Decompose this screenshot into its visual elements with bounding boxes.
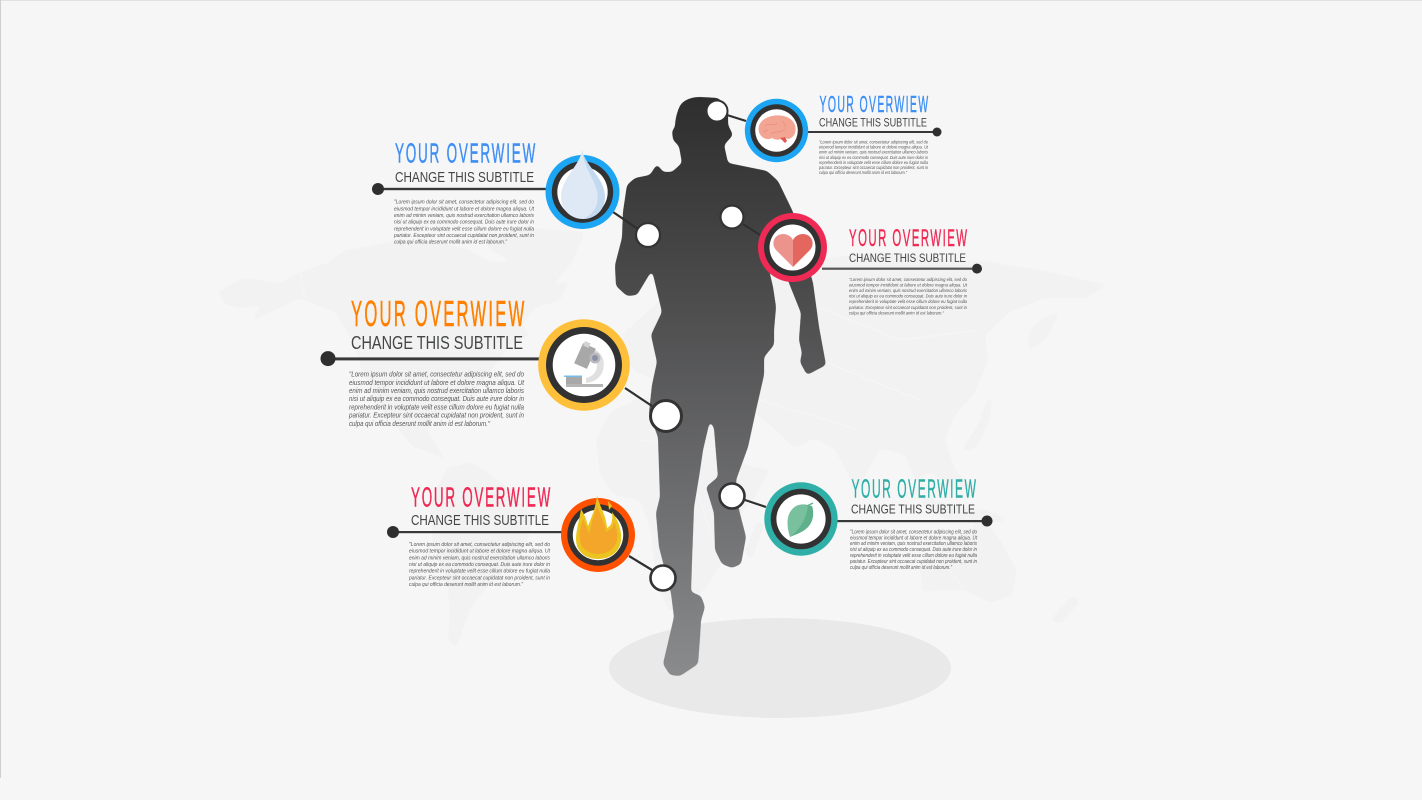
panel: water overview: YOUR OVERWIEW [395, 138, 537, 168]
water paragraph [393, 200, 534, 246]
water paragraph: eiusmod tempor incididunt ut labore et dolore magna aliqua. Ut [394, 206, 534, 212]
fire paragraph: enim ad minim veniam, quis nostrud exercitation ullamco laboris [409, 555, 550, 561]
brain paragraph: pariatur. Excepteur sint occaecat cupidatat non proident, sunt in [818, 165, 928, 170]
heart badge [758, 213, 827, 282]
heart paragraph: eiusmod tempor incididunt ut labore et dolore magna aliqua. Ut [849, 282, 968, 288]
map: south america [430, 462, 533, 648]
leaf leader line [836, 516, 992, 526]
water paragraph: pariatur. Excepteur sint occaecat cupidatat non proident, sunt in [393, 233, 534, 239]
panel: leaf overview: YOUR OVERWIEW [852, 473, 978, 503]
panel: heart overview: YOUR OVERWIEW [849, 225, 968, 252]
water paragraph: "Lorem ipsum dolor sit amet, consectetur adipiscing elit, sed do [394, 200, 534, 206]
heart paragraph: culpa qui officia deserunt mollit anim id est laborum." [849, 310, 944, 316]
runner silhouette [615, 97, 826, 676]
microscope subtitle: CHANGE THIS SUBTITLE [351, 333, 523, 353]
map: africa [596, 398, 770, 610]
icon: microscope [564, 341, 604, 387]
heart paragraph: reprehenderit in voluptate velit esse cillum dolore eu fugiat nulla [849, 299, 967, 305]
fire paragraph: culpa qui officia deserunt mollit anim id est laborum." [409, 582, 524, 588]
map: madagascar [744, 520, 764, 560]
microscope paragraph: nisi ut aliquip ex ea commodo consequat. Duis aute irure dolor in [349, 394, 524, 403]
fire badge [561, 495, 635, 572]
joint markers [636, 100, 744, 590]
microscope paragraph: "Lorem ipsum dolor sit amet, consectetur adipiscing elit, sed do [349, 370, 524, 379]
map: europe and asia [622, 252, 1108, 490]
fire paragraph [408, 542, 550, 588]
fire paragraph: reprehenderit in voluptate velit esse cillum dolore eu fugiat nulla [409, 569, 550, 575]
panel: microscope overview: YOUR OVERWIEW [351, 293, 526, 334]
microscope paragraph: reprehenderit in voluptate velit esse cillum dolore eu fugiat nulla [349, 402, 524, 411]
icon: flame [576, 495, 621, 559]
brain paragraph: eiusmod tempor incididunt ut labore et dolore magna aliqua. Ut [819, 145, 929, 150]
microscope paragraph [348, 370, 525, 428]
map: indonesia [920, 495, 1010, 524]
leaf paragraph: reprehenderit in voluptate velit esse cillum dolore eu fugiat nulla [850, 553, 977, 559]
fire leader line [387, 526, 563, 538]
heart paragraph: enim ad minim veniam, quis nostrud exercitation ullamco laboris [849, 288, 968, 294]
fire paragraph: pariatur. Excepteur sint occaecat cupidatat non proident, sunt in [408, 575, 550, 581]
heart paragraph [848, 277, 968, 316]
ground shadow [609, 618, 951, 718]
fire subtitle: CHANGE THIS SUBTITLE [411, 513, 549, 529]
microscope paragraph: eiusmod tempor incididunt ut labore et dolore magna aliqua. Ut [349, 378, 525, 387]
heart subtitle: CHANGE THIS SUBTITLE [849, 251, 966, 265]
brain subtitle: CHANGE THIS SUBTITLE [819, 116, 927, 129]
microscope leader line [320, 351, 540, 366]
leaf paragraph: culpa qui officia deserunt mollit anim id est laborum." [850, 565, 952, 571]
map border lines [300, 272, 980, 590]
panel: fire overview [387, 482, 635, 588]
microscope badge [538, 319, 630, 411]
map: kamchatka [1028, 312, 1060, 352]
world map background [218, 228, 1108, 648]
map: new zealand [1050, 595, 1080, 624]
panel: brain overview: YOUR OVERWIEW [820, 91, 930, 117]
brain badge [745, 99, 808, 162]
water paragraph: reprehenderit in voluptate velit esse cillum dolore eu fugiat nulla [394, 226, 534, 232]
brain leader line [806, 128, 942, 136]
leaf paragraph: eiusmod tempor incididunt ut labore et dolore magna aliqua. Ut [850, 535, 978, 541]
heart paragraph: "Lorem ipsum dolor sit amet, consectetur adipiscing elit, sed do [849, 277, 967, 283]
leaf paragraph: "Lorem ipsum dolor sit amet, consectetur adipiscing elit, sed do [850, 529, 977, 535]
fire paragraph: eiusmod tempor incididunt ut labore et dolore magna aliqua. Ut [409, 549, 550, 555]
brain paragraph: enim ad minim veniam, quis nostrud exercitation ullamco laboris [819, 150, 929, 155]
brain paragraph [818, 140, 929, 175]
water paragraph: nisi ut aliquip ex ea commodo consequat. Duis aute irure dolor in [394, 220, 534, 226]
brain paragraph: culpa qui officia deserunt mollit anim id est laborum." [819, 170, 907, 175]
water paragraph: culpa qui officia deserunt mollit anim id est laborum." [394, 240, 508, 246]
brain paragraph: "Lorem ipsum dolor sit amet, consectetur adipiscing elit, sed do [819, 140, 928, 144]
panel: fire overview: YOUR OVERWIEW [411, 482, 552, 512]
map: japan [960, 395, 992, 452]
map: greenland [482, 228, 585, 292]
heart leader line [822, 264, 982, 274]
microscope paragraph: culpa qui officia deserunt mollit anim id est laborum." [349, 419, 490, 428]
water subtitle: CHANGE THIS SUBTITLE [395, 170, 534, 186]
water leader line [372, 183, 548, 195]
panel: heart overview [758, 213, 982, 316]
heart paragraph: pariatur. Excepteur sint occaecat cupidatat non proident, sunt in [848, 305, 967, 311]
panel: microscope overview [320, 293, 630, 428]
panel: water overview [372, 138, 620, 246]
fire paragraph: "Lorem ipsum dolor sit amet, consectetur adipiscing elit, sed do [409, 542, 550, 548]
brain paragraph: nisi ut aliquip ex ea commodo consequat. Duis aute irure dolor in [819, 155, 928, 160]
connector lines [613, 115, 766, 570]
microscope paragraph: enim ad minim veniam, quis nostrud exercitation ullamco laboris [349, 386, 524, 395]
icon: water drop [561, 150, 605, 219]
map: australia [920, 522, 1017, 603]
leaf badge [764, 482, 838, 556]
microscope paragraph: pariatur. Excepteur sint occaecat cupidatat non proident, sunt in [348, 411, 524, 420]
water badge [546, 150, 620, 229]
leaf paragraph: nisi ut aliquip ex ea commodo consequat. Duis aute irure dolor in [850, 547, 977, 553]
heart paragraph: nisi ut aliquip ex ea commodo consequat. Duis aute irure dolor in [849, 294, 967, 300]
brain paragraph: reprehenderit in voluptate velit esse cillum dolore eu fugiat nulla [819, 160, 928, 165]
icon: heart [773, 234, 813, 267]
leaf paragraph [849, 529, 978, 571]
fire paragraph: nisi ut aliquip ex ea commodo consequat. Duis aute irure dolor in [409, 562, 550, 568]
leaf subtitle: CHANGE THIS SUBTITLE [851, 501, 975, 516]
icon: brain [759, 115, 796, 143]
map: north america [218, 240, 570, 462]
leaf paragraph: pariatur. Excepteur sint occaecat cupidatat non proident, sunt in [849, 559, 977, 565]
leaf paragraph: enim ad minim veniam, quis nostrud exercitation ullamco laboris [850, 541, 977, 547]
icon: leaf [788, 503, 813, 537]
panel: brain overview [745, 91, 942, 175]
water paragraph: enim ad minim veniam, quis nostrud exercitation ullamco laboris [394, 213, 534, 219]
panel: leaf overview [764, 473, 992, 571]
